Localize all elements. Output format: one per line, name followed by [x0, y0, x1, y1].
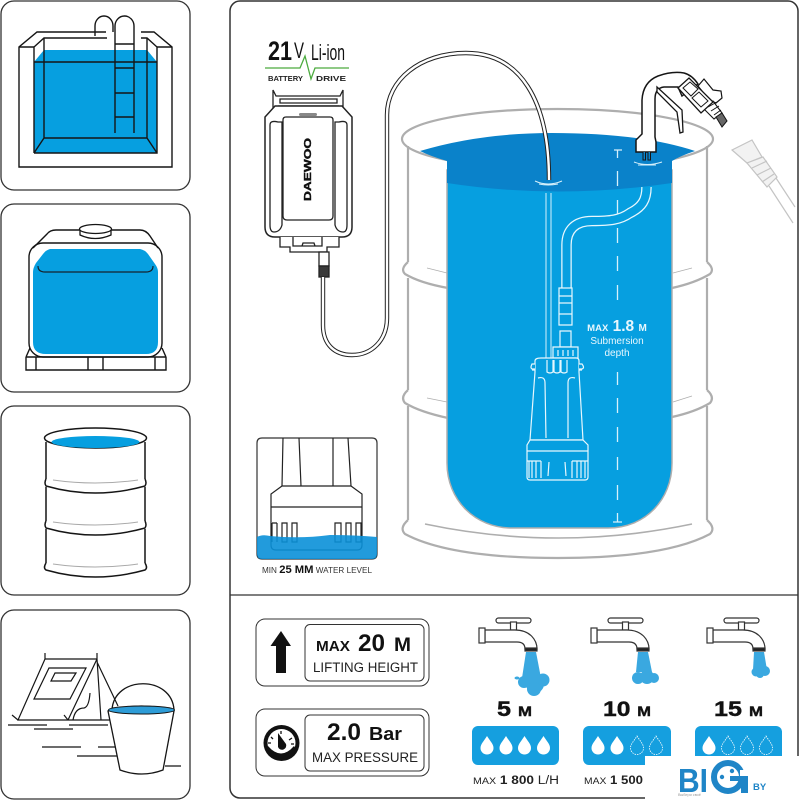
- spec: lifting height: [256, 619, 429, 686]
- flow column: 10 m: [583, 618, 671, 787]
- depth label: [587, 318, 647, 359]
- watermark logo: BY: [753, 782, 767, 793]
- threaded outlet: [703, 101, 722, 119]
- inset pump: [271, 438, 362, 550]
- spec: max pressure: MAX PRESSURE: [312, 750, 418, 765]
- depth label: depth: [604, 348, 630, 359]
- watermark logo: [645, 756, 799, 800]
- flow column: 5 m: 5 M: [497, 698, 532, 721]
- tank cap: [80, 224, 112, 238]
- discharge hose: [566, 187, 646, 288]
- inset caption: MIN 25 MM WATER LEVEL: [262, 564, 373, 576]
- barrel body: [402, 109, 713, 558]
- panel: tent and bucket: [1, 610, 190, 799]
- battery logo: DAEWOO: [303, 138, 314, 201]
- water stream: [632, 652, 659, 684]
- flow column: 10 m: MAX 1 500: [584, 775, 643, 787]
- battery pack: [265, 90, 352, 277]
- hose fitting detached: [732, 140, 795, 223]
- depth label: MAX 1.8 M: [587, 318, 647, 335]
- spec: max pressure: Bar: [369, 724, 402, 744]
- icon: gauge: [264, 725, 300, 761]
- power cord: [323, 53, 562, 358]
- tank body outline: [26, 230, 166, 370]
- inset: minimum water level: [257, 438, 377, 576]
- inset water: [257, 535, 377, 559]
- flow column: 5 m: [472, 618, 559, 787]
- depth scale: [613, 150, 622, 522]
- flow rating: [583, 726, 671, 765]
- faucet adapter on barrel rim: [634, 72, 727, 165]
- icon: faucet: [591, 618, 649, 651]
- battery drive badge: 21: [268, 36, 292, 66]
- mounting bracket: [657, 87, 683, 133]
- valve block: [678, 78, 713, 113]
- submersible pump: [527, 288, 588, 480]
- spec: lifting height: 20: [358, 630, 385, 657]
- flow column: 5 m: MAX 1 800 L/H: [473, 775, 559, 787]
- barrel water: [52, 436, 140, 448]
- spec: max pressure: [256, 709, 429, 776]
- pool water: [34, 50, 157, 153]
- water stream: [514, 652, 550, 696]
- tent: [8, 653, 181, 766]
- pool outline: [19, 16, 172, 167]
- panel: barrel: [1, 406, 190, 595]
- spec: lifting height: LIFTING HEIGHT: [313, 660, 418, 675]
- battery drive badge: [265, 36, 349, 83]
- panel: water tank: [1, 204, 190, 392]
- panel: main illustration: [230, 1, 798, 798]
- flow column: 10 m: 10 M: [603, 698, 651, 721]
- panel: swimming pool: [1, 1, 190, 190]
- barrel outline: [44, 428, 146, 577]
- battery drive badge: V: [294, 38, 304, 63]
- flow column: 15 m: 15 M: [714, 698, 763, 721]
- flow rating: [472, 726, 559, 765]
- watermark logo: BI: [678, 762, 708, 799]
- depth label: Submersion: [590, 336, 644, 347]
- water stream: [752, 652, 770, 678]
- knob stem: [698, 79, 722, 103]
- tap spout: [636, 72, 698, 152]
- icon: up arrow: [270, 631, 291, 673]
- flow column: 15 m: [695, 618, 782, 765]
- bucket: [108, 684, 174, 774]
- spec: max pressure: 2.0: [327, 719, 361, 746]
- battery drive badge: BATTERY: [268, 74, 303, 83]
- tank water: [33, 249, 158, 354]
- flow rating: [695, 726, 782, 765]
- battery drive badge: DRIVE: [316, 74, 346, 83]
- water inside barrel: [447, 170, 672, 528]
- battery drive badge: Li-ion: [311, 40, 345, 65]
- watermark logo: Выбери своё: [678, 793, 701, 797]
- icon: faucet: [707, 618, 765, 651]
- icon: faucet: [479, 618, 537, 651]
- spec: lifting height: M: [394, 635, 411, 656]
- spec: lifting height: MAX: [316, 638, 350, 655]
